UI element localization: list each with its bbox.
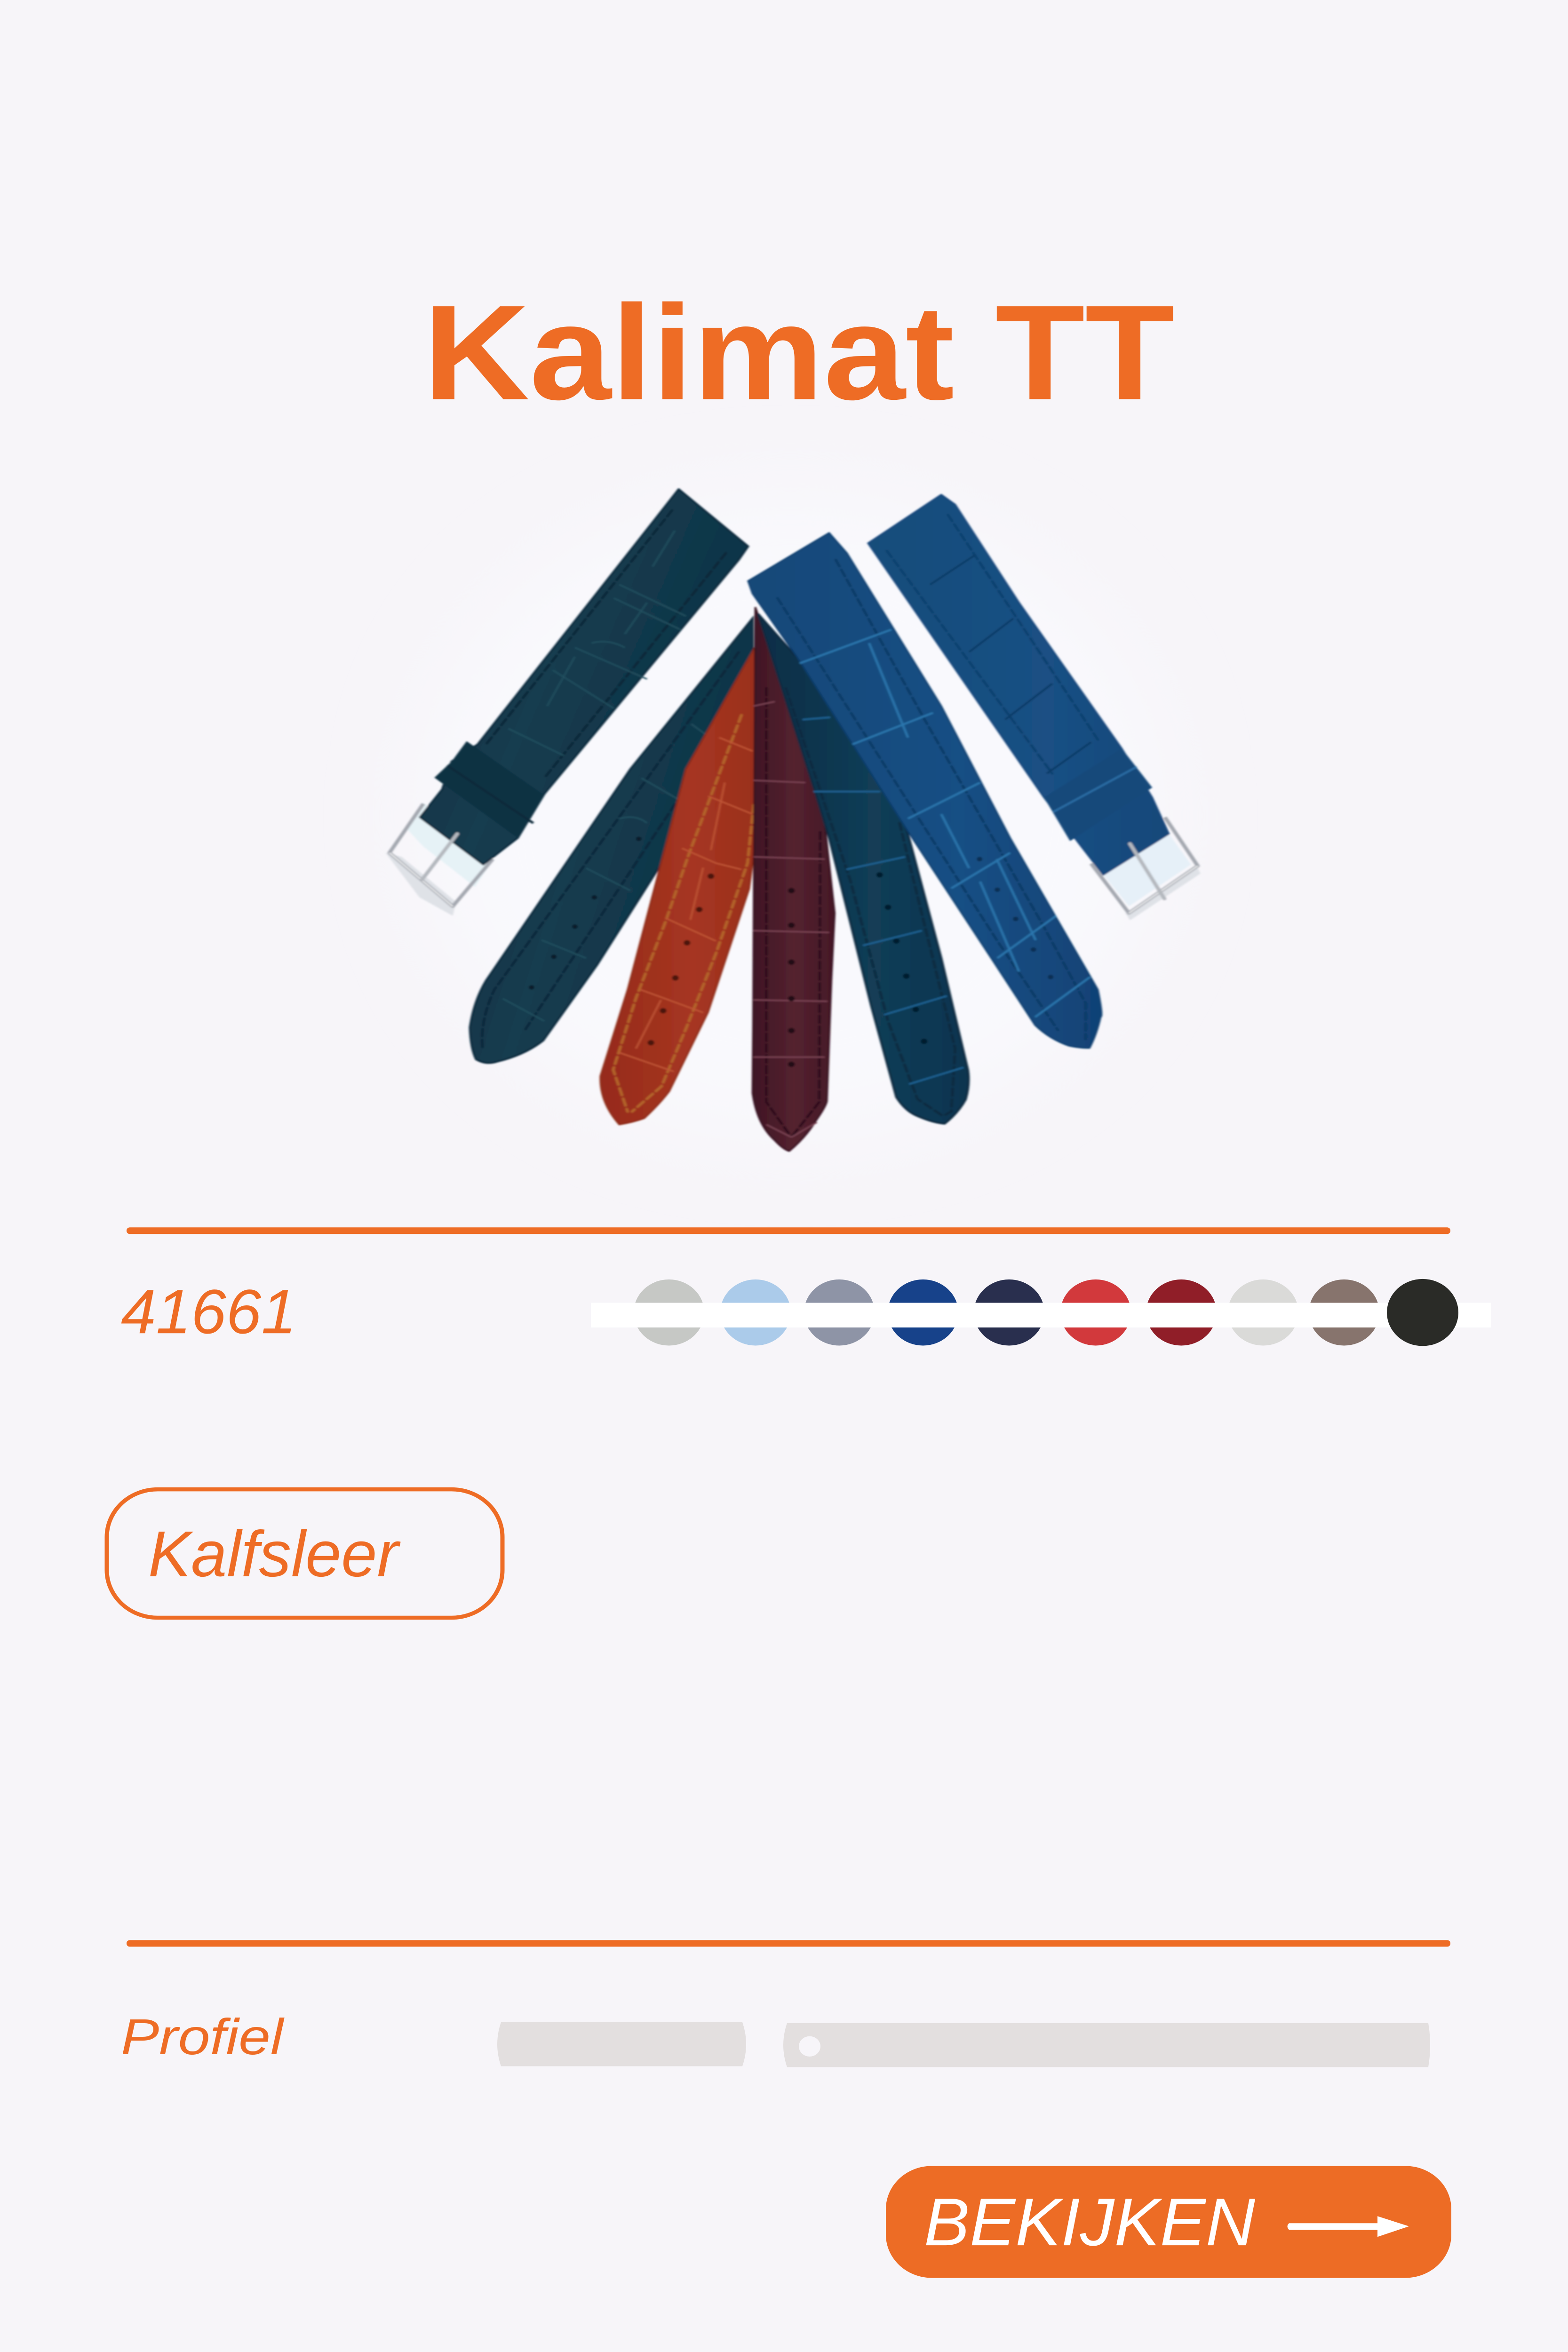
strap: dark teal, long left xyxy=(470,618,753,1063)
title: Kalimat TT xyxy=(423,277,1175,428)
buckle left xyxy=(386,803,494,916)
article number: 41661 xyxy=(121,1277,296,1347)
strap: dark teal with buckle, far left xyxy=(386,489,748,916)
strap: bright blue xyxy=(748,533,1101,1048)
strap: maroon xyxy=(753,607,835,1151)
strap: red-brown xyxy=(600,648,755,1125)
strap: bright blue with buckle, far right xyxy=(868,494,1201,920)
profile diagram xyxy=(497,2022,1430,2067)
arrow xyxy=(1287,2216,1409,2237)
view button xyxy=(886,2166,1451,2278)
strap: navy teal xyxy=(758,614,969,1124)
view button: BEKIJKEN xyxy=(924,2185,1256,2260)
buckle right xyxy=(1091,817,1201,920)
bottom divider line xyxy=(127,1940,1450,1947)
material tag xyxy=(107,1489,502,1618)
colour swatches xyxy=(591,1279,1491,1346)
top divider line xyxy=(127,1227,1450,1234)
photo background glow xyxy=(423,498,1157,1134)
buckle tongue xyxy=(422,834,457,879)
buckle tongue xyxy=(1130,844,1164,899)
strap keeper xyxy=(1044,748,1152,841)
product photo: fan of leather watch straps xyxy=(386,489,1201,1151)
material tag: Kalfsleer xyxy=(148,1518,401,1590)
strap keeper xyxy=(434,741,544,838)
profile label: Profiel xyxy=(121,2008,285,2065)
